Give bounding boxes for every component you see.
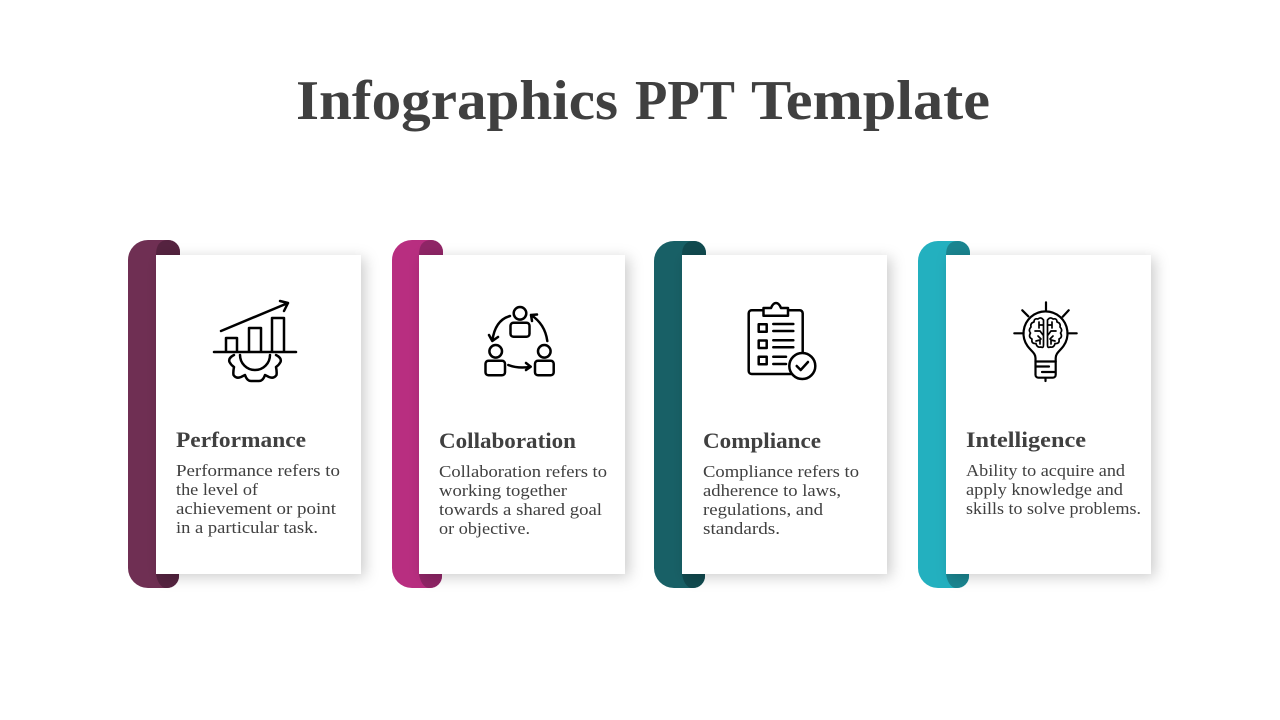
heading: compliance: Compliance [703, 428, 821, 453]
text: compliance description: adherence to laws, [703, 481, 841, 500]
card: compliance [682, 255, 887, 574]
text: intelligence description: apply knowledge and [966, 480, 1124, 499]
text: compliance description: Compliance refers to [703, 462, 859, 481]
title [296, 70, 990, 132]
text: intelligence description: Ability to acquire and [966, 461, 1126, 480]
card: collaboration [419, 255, 625, 574]
icon: brain light bulb [1014, 302, 1077, 381]
text: collaboration description [439, 462, 607, 538]
ribbon: compliance [654, 241, 706, 588]
panel: collaboration [392, 240, 625, 588]
icon: growth chart with gear [214, 301, 296, 381]
text: collaboration description: or objective. [439, 519, 530, 538]
icon: checklist clipboard [749, 303, 815, 379]
text: performance description: in a particular task. [176, 518, 318, 537]
title: Template [751, 70, 990, 132]
ribbon: performance [128, 240, 180, 588]
heading: collaboration: Collaboration [439, 428, 576, 453]
text: collaboration description: Collaboration refers to [439, 462, 607, 481]
heading: performance: Performance [176, 427, 306, 452]
title: Infographics [296, 70, 618, 132]
text: performance description [176, 461, 340, 537]
text: collaboration description: working together [439, 481, 568, 500]
text: performance description: Performance refers to [176, 461, 340, 480]
panel: performance [128, 240, 361, 588]
icon: team cycle [486, 307, 554, 375]
title: PPT [635, 70, 735, 132]
card: performance [156, 255, 361, 574]
panel: compliance [654, 241, 887, 588]
heading: intelligence: Intelligence [966, 427, 1086, 452]
text: compliance description: standards. [703, 519, 780, 538]
text: performance description: the level of [176, 480, 259, 499]
text: intelligence description: skills to solve problems. [966, 499, 1141, 518]
panel: intelligence [918, 241, 1151, 588]
ribbon: collaboration [392, 240, 443, 588]
ribbon: intelligence [918, 241, 970, 588]
text: intelligence description [966, 461, 1141, 518]
text: performance description: achievement or point [176, 499, 336, 518]
text: compliance description [703, 462, 859, 538]
card: intelligence [946, 255, 1151, 574]
text: collaboration description: towards a shared goal [439, 500, 602, 519]
text: compliance description: regulations, and [703, 500, 824, 519]
